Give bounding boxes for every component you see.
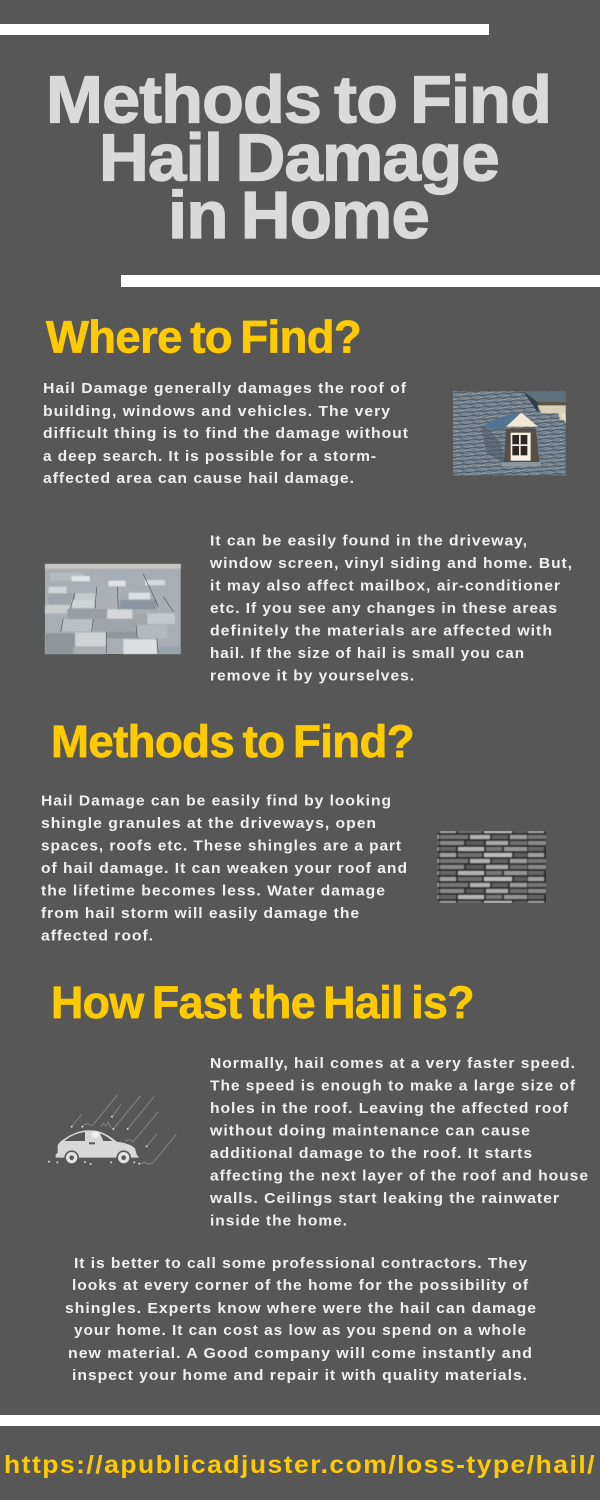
text block: methods: shingle granules at the driveways, open <box>41 816 377 832</box>
text block: speed <box>209 1056 589 1230</box>
text block: contractors: It is better to call some professional contractors. They <box>74 1256 528 1272</box>
text block: contractors: new material. A Good company will come instantly and <box>68 1346 533 1362</box>
text block: where details: It can be easily found in the driveway, <box>210 534 528 550</box>
text block: speed: additional damage to the roof. It starts <box>210 1146 533 1162</box>
text block: methods: Hail Damage can be easily find by looking <box>41 794 392 810</box>
title <box>46 62 551 253</box>
text block: where intro: building, windows and vehicles. The very <box>43 404 391 420</box>
title: Hail Damage <box>99 120 499 196</box>
text block: where details <box>209 534 573 684</box>
text block: contractors: inspect your home and repair it with quality materials. <box>72 1368 528 1384</box>
text block: speed: without doing maintenance can cause <box>209 1124 531 1140</box>
text block: where intro: a deep search. It is possible for a storm- <box>43 449 377 465</box>
icon: car in hail <box>48 1094 176 1165</box>
text block: where details: window screen, vinyl siding and home. But, <box>209 556 573 572</box>
text block: speed: inside the home. <box>210 1214 348 1230</box>
text block: methods <box>41 794 408 944</box>
footer link: https://apublicadjuster.com/loss-type/hail/ <box>4 1451 596 1479</box>
text block: speed: holes in the roof. Leaving the affected roof <box>210 1101 569 1117</box>
text block: contractors <box>65 1256 537 1384</box>
title: Methods to Find <box>46 62 551 138</box>
text block: methods: of hail damage. It can weaken your roof and <box>41 861 408 877</box>
text block: contractors: looks at every corner of the home for the possibility of <box>72 1278 529 1294</box>
text block: where details: definitely the materials are affected with <box>210 624 553 640</box>
heading: methods to find: Methods to Find? <box>51 716 414 767</box>
text block: methods: from hail storm will easily damage the <box>41 906 360 922</box>
image: wood shingles <box>437 831 546 903</box>
text block: where intro: Hail Damage generally damages the roof of <box>43 381 407 397</box>
top bar <box>0 24 489 35</box>
image: paving stones <box>44 563 182 655</box>
text block: contractors: shingles. Experts know where were the hail can damage <box>65 1301 537 1317</box>
heading: how fast: How Fast the Hail is? <box>51 977 474 1028</box>
text block: speed: The speed is enough to make a large size of <box>210 1078 576 1094</box>
text block: where details: hail. If the size of hail is small you can <box>210 646 525 662</box>
text block: where intro: affected area can cause hail damage. <box>43 471 355 487</box>
heading: where to find: Where to Find? <box>46 312 361 362</box>
text block: speed: walls. Ceilings start leaking the rainwater <box>209 1191 560 1207</box>
text block: where intro <box>43 381 409 487</box>
footer bar <box>0 1415 600 1426</box>
text block: methods: affected roof. <box>41 928 154 944</box>
text block: where details: etc. If you see any changes in these areas <box>210 601 558 617</box>
text block: speed: Normally, hail comes at a very faster speed. <box>210 1056 576 1072</box>
text block: where details: remove it by yourselves. <box>210 668 415 684</box>
text block: where details: it may also affect mailbox, air-conditioner <box>210 578 561 594</box>
text block: contractors: your home. It can cost as low as you spend on a whole <box>74 1323 527 1339</box>
text block: speed: affecting the next layer of the roof and house <box>210 1168 589 1184</box>
title: in Home <box>168 178 429 253</box>
text block: methods: the lifetime becomes less. Water damage <box>41 884 386 900</box>
text block: where intro: difficult thing is to find the damage without <box>43 426 409 442</box>
title underline bar <box>121 275 600 287</box>
image: roof dormer <box>453 391 566 476</box>
text block: methods: spaces, roofs etc. These shingles are a part <box>41 838 402 854</box>
